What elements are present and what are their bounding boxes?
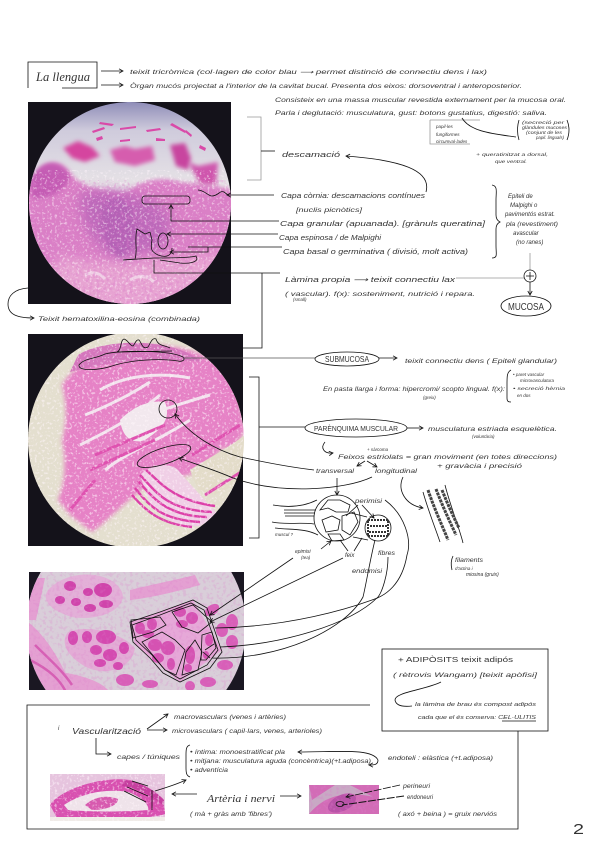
text: microvascular: microvasculars ( capil·lars, venes, arterioles) (172, 729, 322, 735)
text: lamina function: (small) (293, 297, 307, 302)
arrow: to tunics (96, 738, 111, 754)
label: capa còrnia: [nuclis picnòtics] (294, 208, 362, 214)
bracket: desquamating zone (247, 117, 261, 180)
arrow: to transversal (357, 461, 365, 466)
text: tissue description: teixit tricròmica (col·lagen de color blau ⟶ permet distinció de connectiu dens i lax) (130, 70, 487, 76)
text: shape and function (323, 387, 505, 400)
arrow: to longitudinal (367, 461, 377, 467)
annotations on micrograph (123, 190, 228, 263)
label: perimisi: perimisi (354, 499, 383, 505)
label: capa basal: Capa basal o germinativa ( divisió, molt activa) (283, 249, 468, 256)
arrow: parenchyma (407, 427, 423, 429)
text: epithelium of Malpighi: pavimentós estrat. (504, 212, 555, 218)
arrow: transversal to bundle (336, 478, 338, 495)
text: shape and function: (greix) (423, 395, 436, 400)
list: tunics: • íntima: monoestratificat pla (190, 750, 286, 756)
label: endomisi: endomisi (352, 569, 383, 575)
heading: vascularisation (58, 726, 142, 736)
label: longitudinal: longitudinal (375, 469, 418, 475)
list: papillae: circumval·lades (436, 139, 468, 144)
text: endoneuri: endoneuri (407, 795, 434, 801)
label: mucosa oval: MUCOSA (508, 302, 544, 313)
micrograph: submucosa and muscle (28, 334, 245, 546)
arrow: label to artery (172, 793, 197, 795)
note: glands: glàndules mucoses (522, 125, 568, 130)
text: striated muscle (428, 427, 557, 439)
symbol: plus (524, 270, 536, 282)
text: bundles: Feixos estriolats = gran moviment (en totes direccions) (338, 454, 557, 461)
curve: stain label (8, 288, 34, 318)
text: striated muscle: (voluntària) (472, 434, 495, 439)
list: tunics: • adventícia (190, 768, 229, 774)
page number: 2 (573, 821, 584, 838)
title box: La llengua: La llengua (35, 69, 90, 84)
text: epithelium of Malpighi (504, 194, 558, 246)
note: glands (518, 120, 569, 140)
curve: to longitudinal drawing (401, 477, 423, 508)
curve: longitudinal to micrograph ellipse (179, 458, 372, 489)
text: epithelium of Malpighi: Epiteli de (508, 194, 533, 200)
text: epithelium of Malpighi: pla (revestiment) (505, 222, 558, 228)
label: filaments: filaments (455, 558, 483, 564)
arrow: to macrovascular (147, 714, 168, 729)
text: endothelium: endoteli : elàstica (+t.adiposa) (388, 756, 493, 762)
label: filaments (451, 556, 499, 578)
drawing: muscle bundle cross-section (272, 495, 391, 541)
tick: bracket to parenchyma (259, 426, 305, 428)
curve: to bundles (323, 442, 333, 453)
text: lamina function: ( vascular). f(x): sosteniment, nutrició i repara. (285, 292, 475, 298)
panel: vascularisation (27, 705, 518, 829)
note: keratinised (476, 152, 548, 164)
label: transversal: transversal (316, 469, 355, 475)
leader: epimisi to bundle (210, 558, 293, 615)
leader: endomisi to bundle (212, 540, 375, 658)
label: epimisi (295, 549, 311, 560)
curve: transversal to micrograph circle (175, 414, 314, 470)
title box: La llengua (28, 62, 97, 88)
brace: tunics (186, 745, 190, 777)
leader: capa espinosa (167, 233, 278, 235)
micrograph: mucosa (25, 102, 240, 310)
tick: bracket to descamació (261, 150, 275, 152)
box: adipocytes: la làmina de brau és compost adipós (415, 702, 537, 708)
line: epithelium to plus (529, 253, 531, 270)
box: adipocytes: ( rètrovis Wangam) [teixit apòfisi] (393, 673, 538, 679)
label: artery and nerve: Artèria i nervi (206, 794, 275, 805)
list: functions of submucosa: • secreció hèrnia (513, 386, 566, 391)
micrograph: nerve (309, 785, 379, 817)
text: shape and function: En pasta llarga i forma: hipercromi/ scopto lingual. f(x): (323, 387, 505, 393)
list: papillae: fungiformes (436, 132, 460, 137)
label: capa còrnia (281, 193, 426, 214)
line: lamina propria to plus (456, 277, 524, 279)
heading: vascularisation: Vascularització (72, 727, 142, 736)
arrow: artery to tunics (155, 780, 186, 791)
drawing: muscle bundle cross-section: muscul ? (275, 532, 294, 537)
list: functions of submucosa: microvasculatura (520, 378, 555, 383)
text: bundles: + gravàcia i precisió (437, 464, 523, 470)
text: composition: Consisteix en una massa muscular revestida externament per la mucosa oral. (275, 98, 566, 104)
curve: endotheli to media (369, 760, 378, 765)
leader: fibres to bundle (220, 557, 388, 647)
leader: feix to bundle (210, 558, 343, 622)
arrow: perimisi to fibres (346, 505, 374, 518)
note: keratinised: que ventral. (495, 159, 527, 164)
arrow: contínua to descamació (346, 156, 427, 192)
text: organ description: Òrgan mucós projectat a l'interior de la cavitat bucal. Presenta dos eixos: dorsoventral i anteroposterior. (130, 83, 522, 90)
leader: capa granular (171, 205, 279, 221)
curve: endotheli to intima (298, 751, 378, 760)
leader: perineuri (346, 785, 400, 797)
text: functions: Parla i deglutació: musculatura, gust: botons gustatius, digestió: saliva. (275, 111, 547, 117)
arrow: submucosa (379, 357, 397, 359)
leader: lamina propria (154, 260, 280, 273)
heading: vascularisation: i (58, 726, 60, 732)
text: epithelium of Malpighi: Malpighi o (510, 203, 538, 209)
list: tunics (190, 750, 371, 774)
text: artery note: ( mà + gràs amb 'fibres') (190, 812, 272, 818)
label: parenchyma oval (305, 419, 407, 437)
list: papillae: papil·les (435, 124, 454, 129)
list: functions of submucosa: en dos (517, 393, 531, 398)
label: feix: feix (345, 553, 355, 559)
text: striated muscle: musculatura estriada esquelètica. (428, 427, 557, 433)
arrows: feix (340, 538, 362, 551)
label: submucosa oval (315, 352, 379, 366)
label: filaments: d'actina i (455, 566, 474, 571)
label: stain: Teixit hematoxilina-eosina (combinada) (38, 317, 200, 323)
text: macrovascular: macrovasculars (venes i artèries) (174, 715, 286, 721)
label: filaments: miosina (gruix) (466, 572, 499, 578)
text: submucosa description: teixit connectiu dens ( Epiteli glandular) (405, 359, 557, 365)
text: bundles (338, 447, 557, 470)
text: bundles: + sàrcoma (367, 447, 389, 452)
leader: perimisi to bundle (215, 500, 409, 628)
box: adipocytes (382, 649, 548, 731)
label: capa còrnia: Capa còrnia: descamacions contínues (281, 193, 426, 200)
leader: endoneuri (342, 796, 404, 805)
list: functions of submucosa (507, 370, 566, 402)
label: descamació: descamació (282, 150, 340, 159)
note: glands: (secreció per (522, 120, 565, 125)
arrow: title to organ description (101, 84, 123, 86)
label: lamina propria: Làmina propia ⟶ teixit connectiu lax (285, 277, 456, 284)
list: functions of submucosa: • paret vascular (513, 372, 545, 377)
micrograph: artery (50, 774, 165, 821)
label: capa granular: Capa granular (apuanada). [grànuls queratina] (280, 221, 486, 228)
drawing: longitudinal fibres (423, 485, 463, 543)
label: parenchyma oval: PARÈNQUIMA MUSCULAR (314, 424, 399, 433)
text: tunics: capes / túniques (117, 755, 180, 761)
label: capa espinosa: Capa espinosa / de Malpighi (279, 235, 382, 242)
micrograph: muscle bundle detail (29, 572, 244, 690)
leader: capa còrnia (227, 194, 274, 196)
arrow: epimisi (321, 541, 331, 549)
box: adipocytes: cada que el és conserva: CEL·ULITIS (418, 715, 537, 721)
note: keratinised: + queratinitzat a dorsal, (476, 152, 548, 157)
arrow: title to tissue description (101, 70, 123, 72)
leader: capa basal (170, 247, 282, 252)
box: adipocytes: + ADIPÒSITS teixit adipós (398, 655, 513, 664)
label: fibres: fibres (378, 551, 395, 557)
curve: gustatius to note (462, 118, 516, 137)
annotations on bundle (130, 600, 222, 682)
arrow: to microvascular (147, 729, 167, 731)
connector: submucosa (183, 357, 315, 359)
list: papillae (430, 120, 480, 144)
label: epimisi: (tea) (301, 555, 311, 560)
note: glands: papil. linguals) (535, 135, 564, 140)
text: epithelium of Malpighi: (no ranes) (516, 240, 543, 246)
list: tunics: • mitjana: musculatura aguda (concèntrica)(+t.adiposa) (190, 759, 371, 765)
leader: to submucosa micrograph (172, 273, 262, 348)
text: perineuri: perineuri (402, 784, 431, 790)
text: lamina function (285, 292, 475, 302)
label: epimisi: epimisi (295, 549, 311, 555)
label: submucosa oval: SUBMUCOSA (325, 355, 370, 364)
arrow: label to nerve (280, 795, 301, 797)
annotations on submucosa micrograph (79, 339, 193, 472)
label: mucosa oval (501, 296, 551, 316)
arrow: plus to mucosa (529, 282, 531, 295)
text: nerve thickness: ( axó + beina ) = gruix nerviós (398, 812, 497, 818)
text: epithelium of Malpighi: avascular (513, 231, 540, 237)
brace: epithelial layers (492, 185, 500, 258)
note: glands: (conjunt de les (526, 130, 563, 135)
bracket: muscular parenchyma (249, 377, 259, 538)
